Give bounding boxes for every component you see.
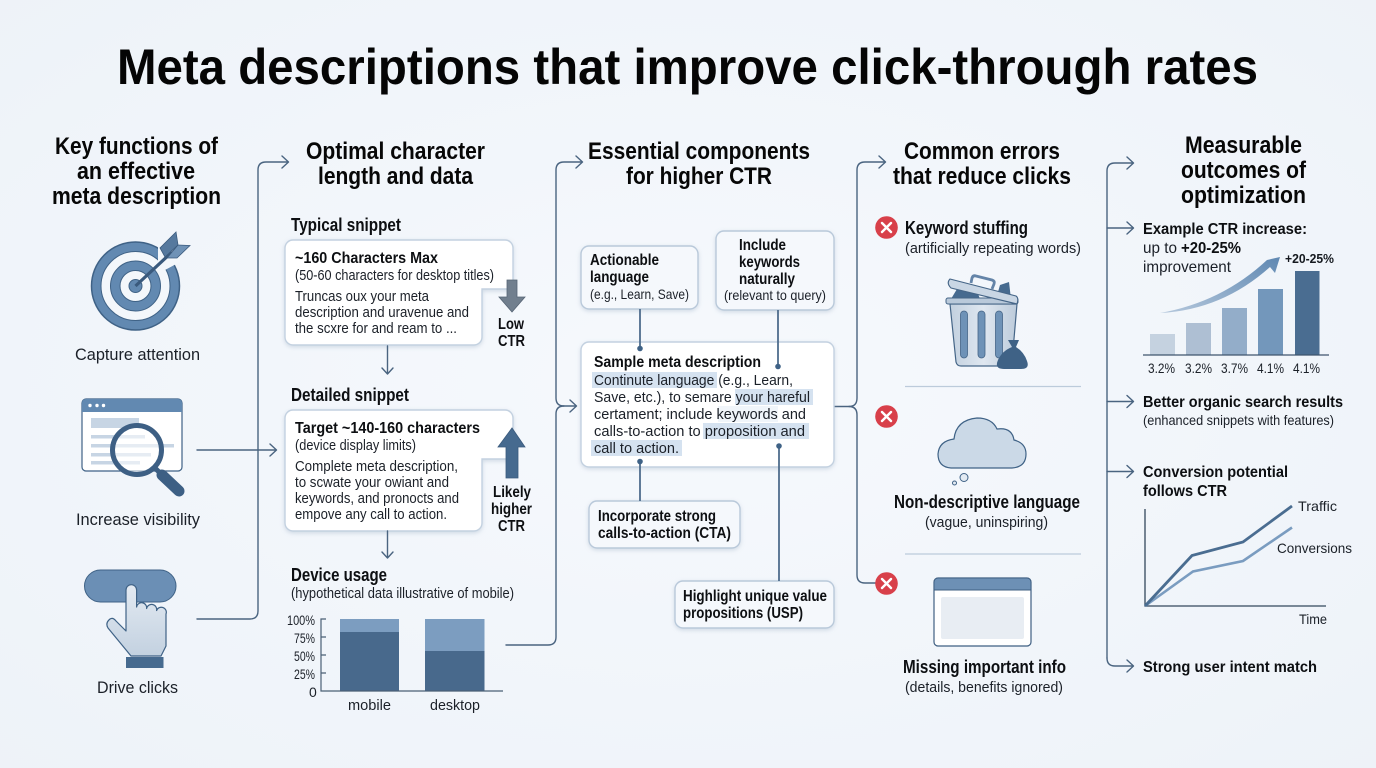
heading: optimal character length: Optimal character [306, 138, 485, 165]
icon: target with arrow [92, 232, 190, 330]
heading: essential components: Essential components [588, 138, 810, 165]
card: include keywords: (relevant to query) [724, 287, 826, 303]
panel: common errors [875, 138, 1081, 696]
card: actionable language [581, 246, 698, 309]
text: example CTR increase: Example CTR increase: [1143, 221, 1307, 238]
bar chart: CTR growth: 3.2% [1148, 360, 1175, 376]
connector: column 3 to column 4 [834, 156, 886, 583]
arrow: detailed to device usage [382, 531, 393, 558]
heading: key functions: Key functions of [55, 133, 219, 160]
card: detailed snippet: empove any call to action. [295, 506, 447, 523]
bar chart: device usage: mobile [348, 697, 391, 714]
text: non-descriptive language: Non-descriptive language [894, 492, 1080, 512]
connector: column 2 to column 3 [506, 156, 582, 645]
arrow: likely higher CTR: CTR [498, 518, 525, 535]
text: non-descriptive language: (vague, uninspiring) [925, 514, 1048, 531]
heading: key functions [52, 133, 221, 210]
card: detailed snippet [285, 410, 513, 531]
bar chart: CTR growth: 4.1% [1293, 360, 1320, 376]
arrow: low CTR [498, 280, 525, 350]
bar chart: CTR growth: +20-25% [1285, 251, 1334, 266]
line chart: traffic and conversions: Time [1299, 611, 1327, 627]
bar chart: device usage: 0 [309, 684, 317, 700]
title: Meta descriptions that improve click-through rates [117, 39, 1258, 95]
card: actionable language: Actionable [590, 252, 659, 269]
card: include keywords: naturally [739, 271, 795, 288]
card: detailed snippet: Complete meta description, [295, 458, 458, 475]
card: typical snippet: (50-60 characters for desktop titles) [295, 267, 494, 284]
card: actionable language: (e.g., Learn, Save) [590, 286, 689, 302]
label: capture attention: Capture attention [75, 345, 200, 364]
icon: error badge 3 [875, 572, 898, 595]
card: sample meta description: Save, etc.), to semare your hareful [594, 389, 810, 406]
bar chart: device usage: 100% [287, 612, 315, 628]
card: unique value propositions: propositions (USP) [683, 605, 803, 622]
bar chart: CTR growth: 3.7% [1221, 360, 1248, 376]
text: better organic search results: (enhanced snippets with features) [1143, 412, 1334, 428]
icon: error badge 1 [875, 216, 898, 239]
text: missing important info: Missing important info [903, 657, 1066, 677]
heading: common errors: that reduce clicks [893, 163, 1071, 190]
heading: measurable outcomes: Measurable [1185, 132, 1302, 159]
line chart: traffic and conversions [1145, 498, 1352, 627]
card: strong calls-to-action: calls-to-action (CTA) [598, 525, 731, 542]
card: typical snippet: ~160 Characters Max [295, 250, 438, 267]
label: device usage: (hypothetical data illustrative of mobile) [291, 585, 514, 602]
card: detailed snippet: (device display limits) [295, 437, 416, 454]
icon: error badge 2 [875, 405, 898, 428]
card: typical snippet: Truncas oux your meta [295, 288, 430, 305]
heading: optimal character length: length and data [318, 163, 474, 190]
bar chart: CTR growth: 4.1% [1257, 360, 1284, 376]
card: include keywords: keywords [739, 254, 800, 271]
icon: cloud with thought bubbles [938, 418, 1026, 485]
card: include keywords: Include [739, 237, 786, 254]
text: missing important info [903, 657, 1066, 696]
panel: measurable outcomes [1143, 132, 1352, 676]
card: detailed snippet: Target ~140-160 characters [295, 420, 480, 437]
label: increase visibility: Increase visibility [76, 510, 200, 529]
icon: trash can with bag [946, 276, 1028, 369]
card: typical snippet [285, 240, 513, 345]
arrow: low CTR: Low [498, 316, 524, 333]
connector: column 1 to column 2 [197, 156, 288, 619]
line chart: traffic and conversions: Traffic [1298, 498, 1337, 514]
card: typical snippet: description and uravenue and [295, 304, 469, 321]
heading: key functions: an effective [77, 158, 195, 185]
label: typical snippet: Typical snippet [291, 215, 401, 235]
text: keyword stuffing [905, 218, 1081, 257]
text: keyword stuffing: Keyword stuffing [905, 218, 1028, 238]
heading: key functions: meta description [52, 183, 221, 210]
card: strong calls-to-action [589, 501, 740, 548]
card: unique value propositions [675, 581, 834, 628]
bar chart: device usage: 25% [294, 666, 315, 682]
text: conversion potential: Conversion potential [1143, 464, 1288, 481]
icon: empty browser window [934, 578, 1031, 646]
bar chart: CTR growth [1143, 251, 1334, 376]
heading: measurable outcomes: optimization [1181, 182, 1306, 209]
text: better organic search results: Better organic search results [1143, 394, 1343, 411]
heading: common errors: Common errors [904, 138, 1060, 165]
text: non-descriptive language [894, 492, 1080, 531]
label: device usage [291, 565, 514, 602]
arrow: typical to detailed [382, 346, 393, 374]
card: typical snippet: the scxre for and ream to ... [295, 320, 457, 337]
text: example CTR increase [1143, 221, 1307, 276]
card: strong calls-to-action: Incorporate strong [598, 508, 716, 525]
text: conversion potential: follows CTR [1143, 483, 1227, 500]
text: example CTR increase: improvement [1143, 259, 1232, 276]
text: keyword stuffing: (artificially repeating words) [905, 240, 1081, 257]
arrow: CTR trend [1160, 257, 1280, 313]
card: sample meta description: certament; include keywords and [594, 406, 806, 423]
bar chart: device usage: desktop [430, 697, 480, 714]
card: detailed snippet: keywords, and pronocts and [295, 490, 459, 507]
heading: measurable outcomes: outcomes of [1181, 157, 1307, 184]
arrow: likely higher CTR: higher [491, 501, 532, 518]
card: detailed snippet: to scwate your owiant and [295, 474, 449, 491]
icon: browser window with magnifier [82, 399, 182, 491]
heading: common errors [893, 138, 1071, 190]
heading: essential components [588, 138, 810, 190]
text: better organic search results [1143, 394, 1343, 428]
panel: key functions [52, 133, 221, 697]
text: example CTR increase: up to [1143, 240, 1177, 257]
text: example CTR increase: +20-25% [1181, 240, 1241, 257]
bar chart: device usage [287, 612, 503, 714]
card: actionable language: language [590, 269, 649, 286]
text: strong user intent match: Strong user intent match [1143, 659, 1317, 676]
card: sample meta description: Continute language (e.g., Learn, [594, 372, 793, 389]
heading: optimal character length [306, 138, 485, 190]
text: conversion potential [1143, 464, 1288, 500]
card: sample meta description: Sample meta description [594, 354, 761, 371]
heading: essential components: for higher CTR [626, 163, 772, 190]
icon: button with pointing hand [84, 570, 176, 668]
label: detailed snippet: Detailed snippet [291, 385, 409, 405]
bar chart: device usage: 50% [294, 648, 315, 664]
arrow: likely higher CTR: Likely [493, 484, 531, 501]
line chart: traffic and conversions: Conversions [1277, 540, 1352, 556]
text: missing important info: (details, benefits ignored) [905, 679, 1063, 696]
bar chart: device usage: 75% [294, 630, 315, 646]
card: sample meta description [581, 342, 834, 467]
card: unique value propositions: Highlight unique value [683, 588, 827, 605]
label: drive clicks: Drive clicks [97, 678, 178, 697]
panel: optimal character length [285, 138, 532, 714]
connectors: components to sample [637, 309, 782, 581]
arrow: low CTR: CTR [498, 333, 525, 350]
heading: measurable outcomes [1181, 132, 1307, 209]
connector: column 5 outcomes [1107, 157, 1134, 672]
arrow: likely higher CTR [491, 428, 532, 535]
panel: essential components [581, 138, 834, 628]
label: device usage: Device usage [291, 565, 387, 585]
card: sample meta description: call to action. [594, 440, 679, 457]
bar chart: CTR growth: 3.2% [1185, 360, 1212, 376]
card: include keywords [716, 231, 834, 310]
card: sample meta description: calls-to-action to proposition and [594, 423, 805, 440]
